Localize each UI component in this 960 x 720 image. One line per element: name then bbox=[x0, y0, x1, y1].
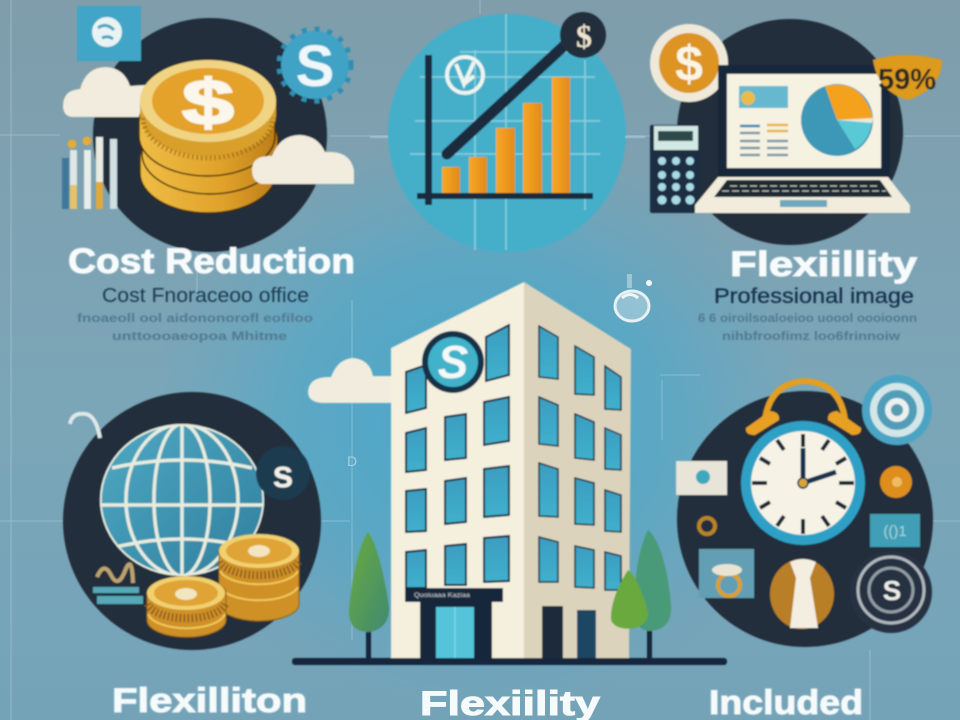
pie chart bbox=[801, 84, 873, 156]
body text bbox=[77, 311, 313, 343]
icon: swirl dollar coin bbox=[850, 551, 932, 633]
icon: target badge bbox=[862, 375, 932, 445]
arrow trend line with dollar bbox=[447, 12, 606, 154]
icon: short coin stack bbox=[147, 576, 226, 637]
icon: globe sketch bbox=[447, 57, 483, 93]
icon: building dollar sign: S bbox=[438, 336, 469, 388]
icon: cloud left bbox=[63, 67, 146, 117]
icon: dollar coin bbox=[650, 24, 728, 102]
ground line bbox=[292, 658, 727, 665]
icon: small wave ornament bbox=[93, 564, 143, 604]
icon: building dollar sign bbox=[422, 331, 484, 393]
entrance bbox=[405, 588, 503, 658]
icon: dollar badge bbox=[256, 446, 310, 500]
icon: stack of gold coins bbox=[139, 60, 278, 213]
icon: mini bar chart bbox=[62, 136, 117, 209]
subheading: professional image: Professional image bbox=[714, 285, 914, 308]
icon: orange token bbox=[880, 466, 912, 498]
body text: 6 6 oiroilsoaloeioo uoool oooioonn bbox=[698, 311, 917, 325]
faint icon near building: D bbox=[347, 453, 357, 469]
tree right bbox=[611, 530, 671, 660]
icon: dollar coin: $ bbox=[675, 36, 703, 92]
icon: dollar badge: s bbox=[272, 454, 294, 496]
body text bbox=[698, 311, 917, 343]
icon: hook ornament bbox=[70, 414, 100, 438]
teal circle backdrop bbox=[388, 14, 626, 252]
icon: tie bbox=[770, 559, 834, 629]
icon: small ring bbox=[699, 518, 715, 534]
tree left bbox=[349, 532, 389, 660]
icon: gear dollar badge: S bbox=[296, 34, 334, 99]
heading: cost reduction: Cost Reduction bbox=[68, 242, 355, 281]
panel: cost reduction bbox=[62, 6, 355, 343]
dark circle backdrop bbox=[63, 392, 321, 650]
icon: alarm clock bbox=[741, 381, 865, 545]
bar chart bbox=[417, 55, 593, 205]
icon: tall coin stack bbox=[219, 534, 299, 621]
panel: growth chart bbox=[370, 12, 645, 252]
heading: flexibility: Flexiillity bbox=[730, 245, 918, 284]
dark circle backdrop bbox=[677, 391, 933, 647]
panel: flexibility professional image bbox=[650, 19, 942, 343]
icon: stack of gold coins: $ bbox=[182, 66, 234, 138]
icon: calculator bbox=[650, 125, 700, 213]
icon: cream card bbox=[676, 461, 727, 495]
icon: percent badge: 59% bbox=[878, 64, 936, 96]
icon: laptop with dashboard bbox=[695, 65, 910, 213]
body text: nihbfroofimz loo6frinnoiw bbox=[722, 329, 901, 343]
icon: cloud bbox=[308, 358, 400, 403]
icon: percent badge bbox=[873, 55, 942, 100]
front windows bbox=[406, 325, 509, 588]
dark circle backdrop bbox=[93, 18, 327, 252]
arrow trend line with dollar: $ bbox=[576, 18, 592, 54]
panel: included services bbox=[676, 375, 933, 720]
icon: cloud right bbox=[252, 135, 354, 184]
icon: bank card square bbox=[77, 6, 141, 61]
building walls bbox=[391, 282, 631, 658]
icon: globe bbox=[100, 424, 264, 576]
icon: teal card bbox=[870, 514, 920, 547]
icon: gear dollar badge bbox=[279, 29, 351, 101]
side doors bbox=[542, 606, 596, 658]
icon: teal square with ring bbox=[699, 549, 754, 598]
subheading: cost office: Cost Fnoraceoo office bbox=[102, 285, 309, 307]
icon: small glass ornament bbox=[615, 274, 652, 321]
icon: swirl dollar coin: S bbox=[883, 575, 901, 606]
body text: fnoaeoll ool aidononorofl eofiloo bbox=[77, 311, 313, 325]
side windows bbox=[539, 326, 621, 590]
panel: central office building bbox=[292, 282, 727, 665]
heading: flexilliton: Flexilliton bbox=[112, 682, 307, 720]
entrance: Quoiuaaa Kaziaa bbox=[414, 593, 471, 599]
icon: teal card: (()1 bbox=[883, 523, 907, 540]
dark circle backdrop bbox=[677, 19, 903, 245]
body text: unttoooaeopoa Mhitme bbox=[112, 329, 287, 343]
panel: global reach bbox=[63, 392, 321, 720]
